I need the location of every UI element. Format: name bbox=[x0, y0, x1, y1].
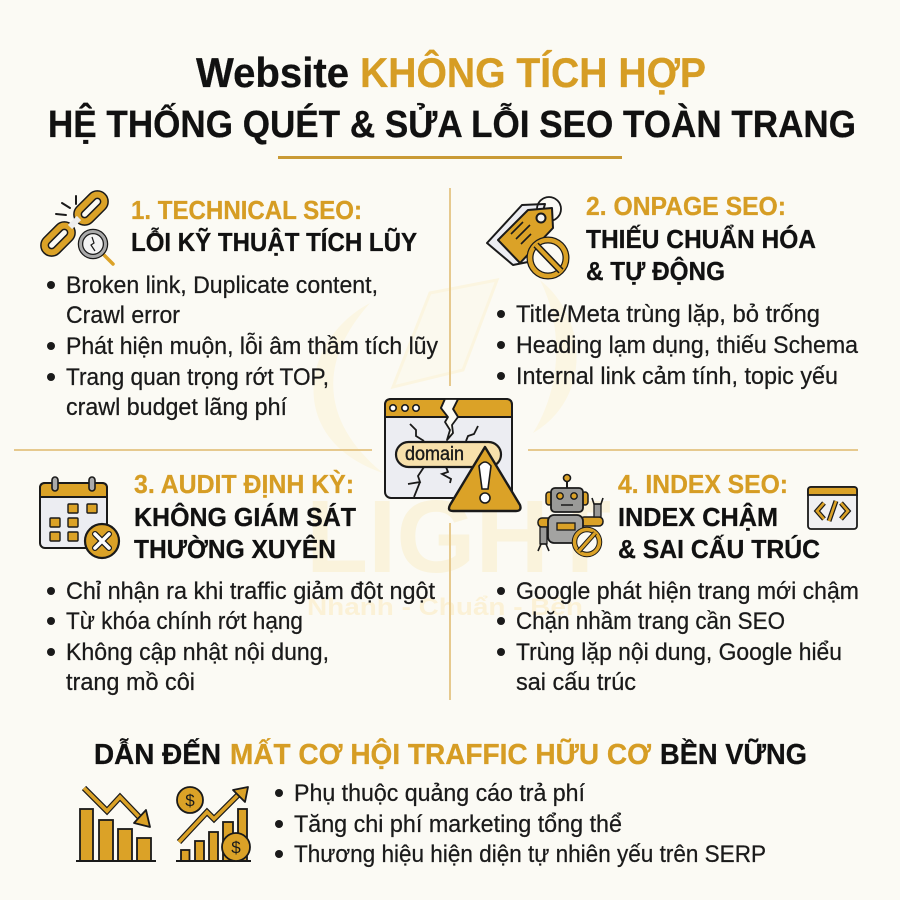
heading: index seo: INDEX CHẬM bbox=[618, 502, 778, 532]
heading: audit dinh ky: KHÔNG GIÁM SÁT bbox=[134, 502, 356, 532]
heading: onpage seo: THIẾU CHUẨN HÓA bbox=[586, 224, 816, 254]
bullet list: index seo: Trùng lặp nội dung, Google hiểu bbox=[516, 639, 842, 666]
bullet list: audit dinh ky bbox=[47, 578, 435, 696]
conclusion heading: BỀN VỮNG bbox=[660, 737, 807, 771]
icon: broken domain window with warning bbox=[385, 399, 520, 511]
bullet list: technical seo: crawl budget lãng phí bbox=[66, 394, 287, 421]
bullet list: onpage seo: Internal link cảm tính, topic yếu bbox=[516, 363, 838, 390]
bullet list: consequences: Tăng chi phí marketing tổng thể bbox=[294, 811, 622, 838]
bullet list: onpage seo: Title/Meta trùng lặp, bỏ trống bbox=[516, 301, 820, 328]
domain label: domain bbox=[405, 444, 464, 465]
heading: index seo: & SAI CẤU TRÚC bbox=[618, 534, 820, 564]
icon: rising bar chart with coins bbox=[176, 787, 251, 861]
bullet list: index seo bbox=[497, 578, 859, 696]
bullet list: onpage seo bbox=[497, 301, 859, 390]
conclusion heading: MẤT CƠ HỘI TRAFFIC HỮU CƠ bbox=[230, 737, 651, 771]
title: KHÔNG TÍCH HỢP bbox=[360, 48, 706, 96]
title: Website bbox=[196, 49, 349, 96]
heading: technical seo: LỖI KỸ THUẬT TÍCH LŨY bbox=[131, 227, 417, 257]
watermark logo: LIGHT bbox=[306, 479, 611, 594]
bullet list: consequences bbox=[275, 780, 766, 868]
icon: calendar with cross bbox=[40, 477, 119, 558]
title: HỆ THỐNG QUÉT & SỬA LỖI SEO TOÀN TRANG bbox=[48, 101, 856, 146]
bullet list: onpage seo: Heading lạm dụng, thiếu Schema bbox=[516, 332, 859, 359]
bullet list: consequences: Thương hiệu hiện diện tự nhiên yếu trên SERP bbox=[294, 841, 766, 868]
heading: audit dinh ky bbox=[134, 469, 356, 564]
heading: onpage seo: & TỰ ĐỘNG bbox=[586, 256, 725, 286]
heading: onpage seo bbox=[586, 191, 816, 286]
icon: rising bar chart with coins: $ bbox=[185, 791, 195, 810]
heading: audit dinh ky: THƯỜNG XUYÊN bbox=[134, 534, 336, 564]
heading: audit dinh ky: 3. AUDIT ĐỊNH KỲ: bbox=[134, 469, 354, 499]
icon: falling bar chart bbox=[76, 788, 156, 861]
bullet list: consequences: Phụ thuộc quảng cáo trả phí bbox=[294, 780, 585, 807]
panel: technical seo bbox=[42, 192, 438, 421]
bullet list: audit dinh ky: Không cập nhật nội dung, bbox=[66, 639, 329, 666]
bullet list: technical seo: Broken link, Duplicate content, bbox=[66, 272, 378, 299]
conclusion heading: DẪN ĐẾN bbox=[94, 737, 221, 771]
bullet list: index seo: Chặn nhầm trang cần SEO bbox=[516, 608, 785, 635]
icon: code window bbox=[808, 487, 857, 529]
panel: onpage seo bbox=[487, 191, 859, 390]
bullet list: technical seo: Crawl error bbox=[66, 302, 180, 329]
heading: technical seo: 1. TECHNICAL SEO: bbox=[131, 195, 362, 225]
bullet list: index seo: Google phát hiện trang mới chậm bbox=[516, 578, 859, 605]
bullet list: audit dinh ky: trang mồ côi bbox=[66, 669, 195, 696]
bullet list: technical seo: Trang quan trọng rớt TOP, bbox=[66, 364, 329, 391]
watermark logo: Nhanh - Chuẩn - Bền bbox=[307, 594, 583, 621]
panel: index seo bbox=[497, 469, 859, 696]
bullet list: audit dinh ky: Từ khóa chính rớt hạng bbox=[66, 608, 303, 635]
conclusion heading bbox=[94, 737, 807, 771]
heading: index seo: 4. INDEX SEO: bbox=[618, 469, 788, 499]
icon: broken chain and magnifier bbox=[42, 192, 113, 264]
bullet list: index seo: sai cấu trúc bbox=[516, 669, 636, 696]
heading: onpage seo: 2. ONPAGE SEO: bbox=[586, 191, 786, 221]
bullet list: technical seo bbox=[47, 272, 438, 421]
icon: robot with prohibition sign bbox=[538, 474, 603, 554]
title bbox=[48, 48, 856, 159]
icon: rising bar chart with coins: $ bbox=[231, 838, 241, 857]
watermark logo bbox=[306, 280, 611, 621]
heading: technical seo bbox=[131, 195, 417, 257]
heading: index seo bbox=[618, 469, 820, 564]
icon: tags with prohibition sign bbox=[487, 197, 566, 276]
bullet list: audit dinh ky: Chỉ nhận ra khi traffic giảm đột ngột bbox=[66, 578, 435, 605]
panel: audit dinh ky bbox=[40, 469, 435, 696]
bullet list: technical seo: Phát hiện muộn, lỗi âm thầm tích lũy bbox=[66, 333, 438, 360]
